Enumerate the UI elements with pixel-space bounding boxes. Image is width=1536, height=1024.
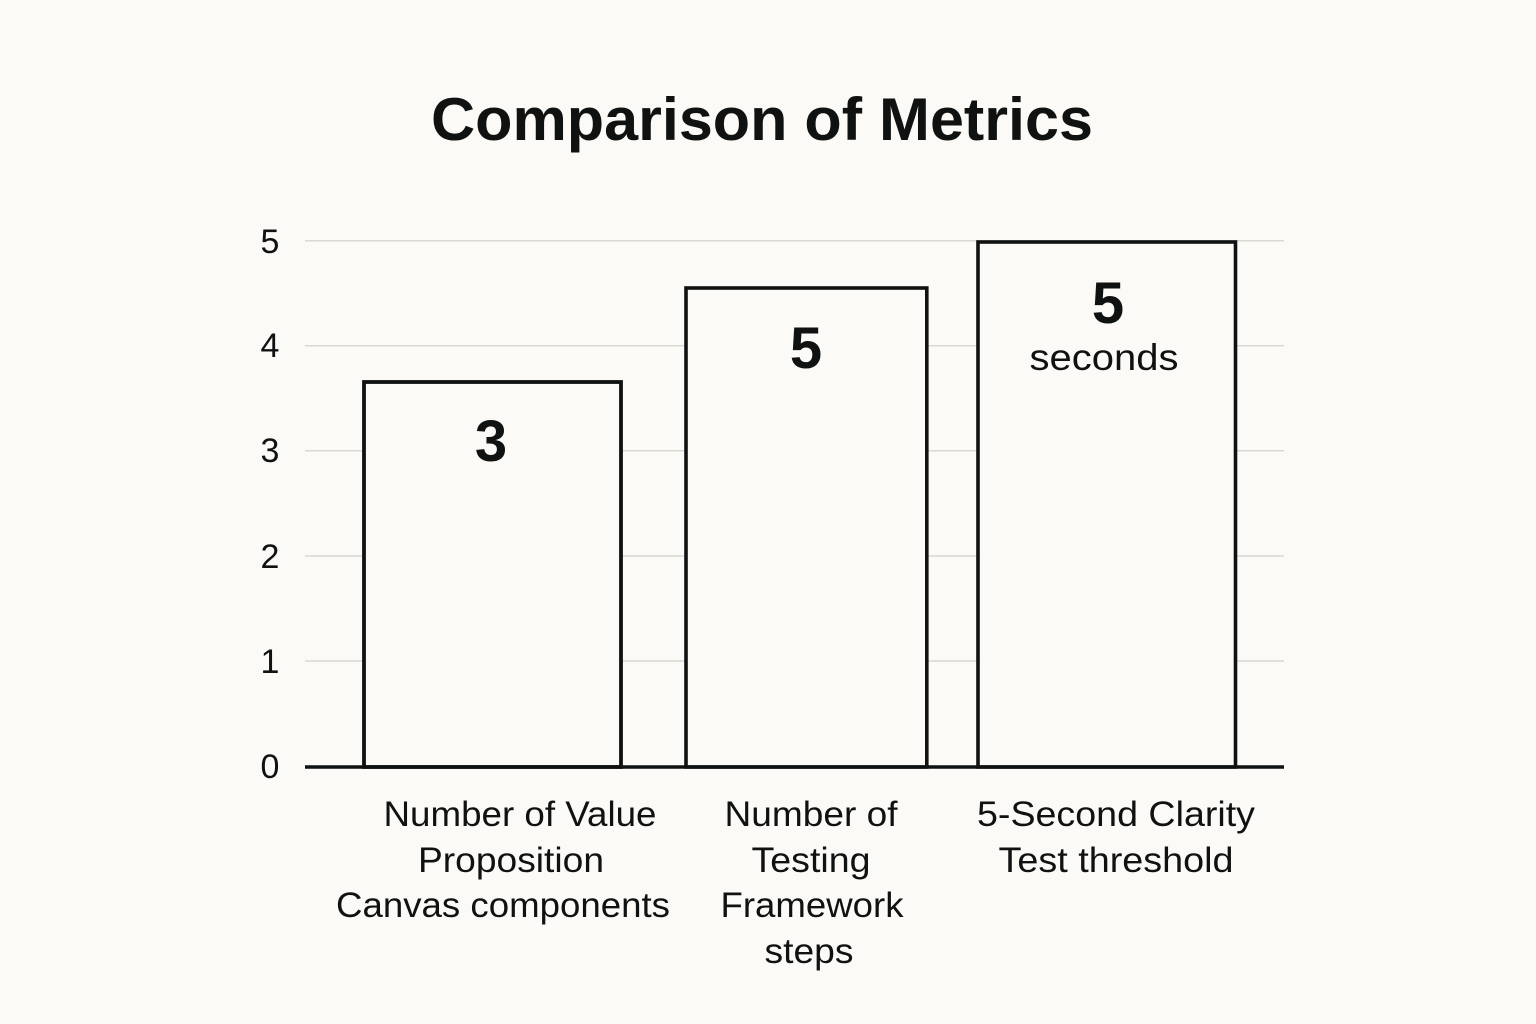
category label: value proposition canvas components: Proposition (418, 841, 604, 880)
category label: testing framework steps: Framework (720, 886, 904, 925)
x-axis baseline (305, 765, 1284, 769)
category label: testing framework steps: Number of (724, 795, 898, 834)
category label: value proposition canvas components: Canvas components (336, 886, 670, 925)
category label: value proposition canvas components (336, 795, 670, 925)
bar: 5-second clarity test threshold: seconds (1030, 337, 1178, 378)
category label: 5-second clarity test threshold (977, 795, 1256, 880)
bar: 5-second clarity test threshold: 5 (1092, 271, 1124, 336)
category label: testing framework steps: Testing (752, 841, 870, 880)
bar: 5-second clarity test threshold (978, 242, 1236, 767)
category label: testing framework steps: steps (764, 932, 854, 971)
category label: 5-second clarity test threshold: Test threshold (998, 841, 1234, 880)
y-axis labels: 1 (261, 643, 279, 681)
title: Comparison of Metrics (431, 86, 1093, 153)
y-axis labels (261, 223, 279, 786)
y-axis labels: 5 (261, 223, 279, 261)
y-axis labels: 3 (261, 432, 279, 470)
y-axis labels: 4 (261, 327, 279, 365)
bar: value proposition canvas components: 3 (475, 409, 507, 474)
bar: testing framework steps (686, 288, 927, 767)
bar: testing framework steps: 5 (790, 316, 822, 381)
category label: 5-second clarity test threshold: 5-Second Clarity (977, 795, 1256, 834)
category label: value proposition canvas components: Number of Value (384, 795, 656, 834)
y-axis labels: 2 (261, 538, 279, 576)
y-axis labels: 0 (261, 748, 279, 786)
bar: value proposition canvas components (364, 382, 621, 767)
category label: testing framework steps (720, 795, 904, 971)
